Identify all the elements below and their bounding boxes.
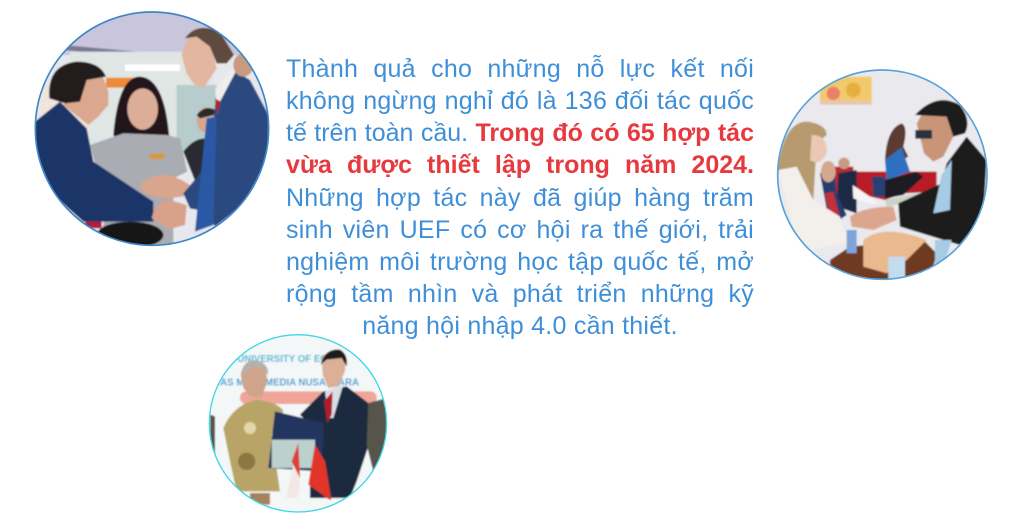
text block: partnership paragraph: nghiệm môi trường học tập quốc tế, mở	[286, 248, 754, 276]
text block: partnership paragraph: Những hợp tác này đã giúp hàng trăm	[286, 184, 754, 212]
text block: partnership paragraph: rộng tầm nhìn và phát triển những kỹ	[286, 280, 754, 308]
text block: partnership paragraph: vừa được thiết lập trong năm 2024.	[286, 151, 754, 179]
photo: handshake between delegates	[30, 5, 277, 252]
text block: partnership paragraph: năng hội nhập 4.0 cần thiết.	[362, 312, 678, 340]
photo: signing ceremony with flags: TAS MULTIMEDIA NUSANTARA	[215, 377, 359, 388]
text block: partnership paragraph: Thành quả cho những nỗ lực kết nối	[286, 55, 754, 83]
text block: partnership paragraph: tế trên toàn cầu. Trong đó có 65 hợp tác	[286, 119, 754, 147]
photo: signing ceremony with flags: Y UNIVERSITY OF ECON	[228, 354, 342, 365]
text block: partnership paragraph: sinh viên UEF có cơ hội ra thế giới, trải	[286, 216, 754, 244]
photo: signing ceremony with flags	[208, 334, 388, 513]
photo: meeting at table	[776, 69, 988, 280]
text block: partnership paragraph	[286, 55, 754, 340]
text block: partnership paragraph: không ngừng nghỉ đó là 136 đối tác quốc	[286, 87, 754, 115]
